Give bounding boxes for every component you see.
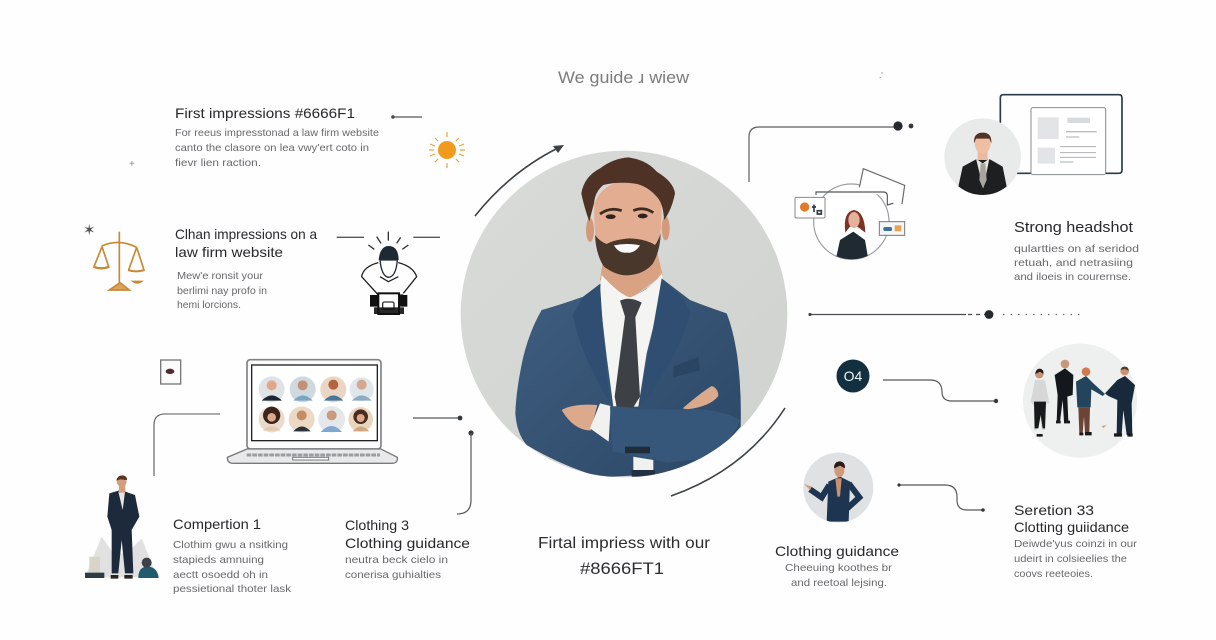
panel: strong headshot: Strong headshot [1014,220,1133,236]
panel: competition: Compertion 1 [173,516,261,532]
panel: clothing guidance [775,543,899,589]
connector: badge to group [883,380,998,403]
panel: first impressions [175,105,379,169]
panel: competition: aectt osoedd oh in [173,569,268,581]
connector: first impressions [391,115,422,119]
badge: 04 [836,360,870,392]
panel: clothing guidance: Cheeuing koothes br [785,562,893,574]
panel: section 33: coovs reeteoies. [1014,568,1093,580]
panel: clean impressions: Clhan impressions on a [175,226,317,242]
panel: strong headshot: qulartties on af seridod [1014,243,1139,255]
panel: strong headshot: retuah, and netrasiing [1014,257,1133,269]
icon: person with idea [337,232,440,314]
panel: section 33: Deiwde'yus coinzi in our [1014,538,1138,550]
decorative star: ✶ [83,222,96,239]
panel: clothing guidance: and reetoal lejsing. [791,577,887,589]
panel: first impressions: First impressions #6666F1 [175,105,355,121]
icon: small book [161,360,181,384]
panel: section 33: udeirt in colsieelies the [1014,553,1127,565]
panel: clean impressions [175,226,317,311]
panel: section 33 [1014,502,1138,580]
panel: strong headshot: and iloeis in courernse. [1014,271,1131,283]
connector: laptop to figure [154,414,220,476]
panel: clothing 3: Clothing 3 [345,517,409,533]
central caption: Firtal impriess with our [538,535,711,552]
icon: standing man [85,475,159,579]
decorative plus: + [129,159,135,170]
panel: competition: Clothim gwu a nsitking [173,539,288,551]
icon: scales of justice [93,232,145,290]
panel: first impressions: canto the clasore on lea vwy'ert coto in [175,142,369,154]
badge: 04: O4 [844,368,863,384]
connector: presenter to section [897,483,985,512]
panel: first impressions: fievr lien raction. [175,157,261,169]
panel: strong headshot [1014,220,1139,283]
panel: competition: stapieds amnuing [173,554,264,566]
panel: section 33: Clotting guiidance [1014,519,1129,535]
panel: clean impressions: Mew'e ronsit your [177,270,264,282]
decorative tick: .' [879,71,883,80]
panel: competition [173,516,292,595]
panel: clean impressions: berlimi nay profo in [177,285,267,297]
connector: laptop to portrait [413,416,462,420]
panel: section 33: Seretion 33 [1014,502,1094,518]
central portrait [461,151,787,477]
connector: top right elbow [749,121,913,182]
icon: group of people [1023,344,1137,458]
panel: clothing 3: neutra beck cielo in [345,554,448,566]
panel: first impressions: For reeus impresstonad a law firm website [175,127,379,139]
icon: laptop with video call [227,360,397,463]
top heading: We guide ɹ wiew [558,68,690,87]
central caption [538,535,711,578]
panel: clothing 3 [345,517,470,581]
panel: clean impressions: law firm website [175,244,283,260]
orbit arc bottom [671,408,785,496]
icon: headshot with profile page [944,95,1122,197]
connector: middle timeline [808,310,1083,319]
central caption: #8666FT1 [580,559,664,578]
panel: clean impressions: hemi lorcions. [177,299,241,311]
icon: sun [429,132,465,168]
panel: clothing 3: Clothing guidance [345,535,470,551]
connector: bottom left elbow [457,430,474,514]
panel: clothing guidance: Clothing guidance [775,543,899,559]
panel: competition: pessietional thoter lask [173,583,292,595]
orbit arrow top [475,145,564,216]
icon: woman with cards [795,169,905,262]
panel: clothing 3: conerisa guhialties [345,569,441,581]
face [586,218,594,242]
icon: presenter [803,453,873,523]
